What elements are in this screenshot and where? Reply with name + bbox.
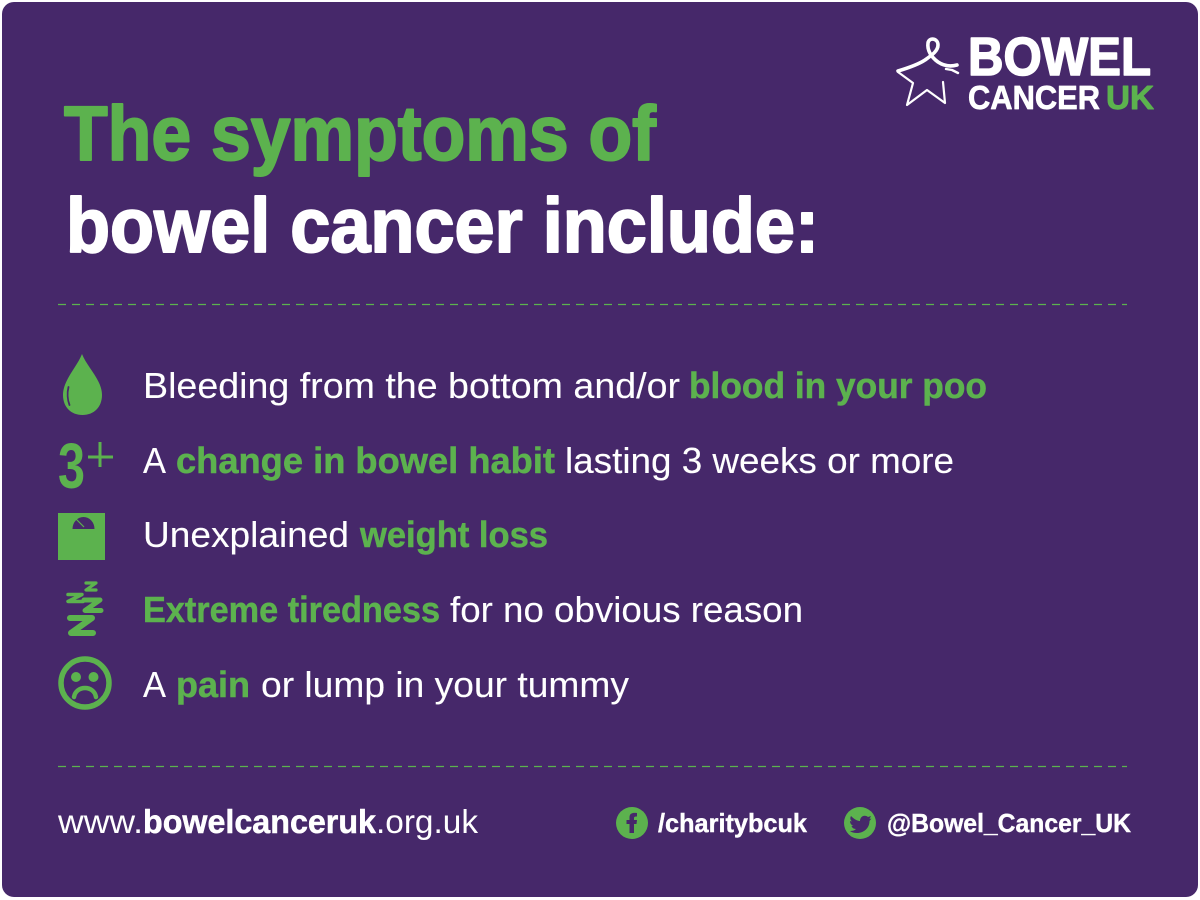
icon: 3 plus: [58, 430, 113, 502]
symptom text: [143, 365, 987, 406]
symptom text: A: [143, 440, 166, 481]
logo wordmark: BOWEL: [968, 27, 1151, 87]
website url: www.: [57, 803, 143, 840]
symptom text: A: [143, 664, 166, 705]
symptom text: or lump in your tummy: [261, 664, 629, 705]
website url: bowelcanceruk: [143, 803, 377, 840]
twitter handle: @Bowel_Cancer_UK: [887, 808, 1131, 838]
website url: [57, 803, 479, 840]
logo wordmark: CANCER: [968, 79, 1100, 116]
icon: sad face: [61, 659, 109, 707]
facebook handle: /charitybcuk: [658, 808, 808, 838]
logo: Bowel Cancer UK: [898, 27, 1154, 116]
symptom: tiredness: [68, 583, 803, 633]
website url: .org.uk: [376, 803, 479, 840]
symptom text: Bleeding from the bottom and/or: [143, 365, 680, 406]
symptom text: [143, 514, 548, 555]
title: [64, 91, 819, 269]
symptom text: [143, 440, 954, 481]
symptom: bowel habit: [58, 430, 954, 502]
icon: ribbon star: [898, 39, 958, 105]
symptom text: Extreme tiredness: [143, 589, 440, 630]
icon: facebook: [616, 807, 648, 839]
symptom: weight loss: [58, 513, 548, 560]
title: bowel cancer include:: [66, 183, 819, 269]
icon: 3 plus: 3: [58, 430, 85, 502]
symptom text: pain: [176, 664, 250, 705]
title: The symptoms of: [64, 91, 656, 177]
symptom text: lasting 3 weeks or more: [565, 440, 954, 481]
symptom text: change in bowel habit: [176, 440, 555, 481]
symptom text: [143, 589, 803, 630]
symptom: pain: [61, 659, 629, 707]
icon: weighing scale: [58, 513, 105, 560]
symptom text: blood in your poo: [689, 365, 987, 406]
icon: blood drop: [63, 354, 102, 415]
icon: zzz: [68, 583, 101, 633]
symptom text: for no obvious reason: [450, 589, 803, 630]
logo wordmark: UK: [1106, 79, 1154, 116]
symptom: bleeding: [63, 354, 987, 415]
symptom text: weight loss: [359, 514, 548, 555]
icon: twitter: [844, 807, 876, 839]
facebook link: [616, 807, 808, 839]
symptom text: Unexplained: [143, 514, 349, 555]
twitter link: [844, 807, 1131, 839]
logo wordmark: [968, 27, 1154, 116]
